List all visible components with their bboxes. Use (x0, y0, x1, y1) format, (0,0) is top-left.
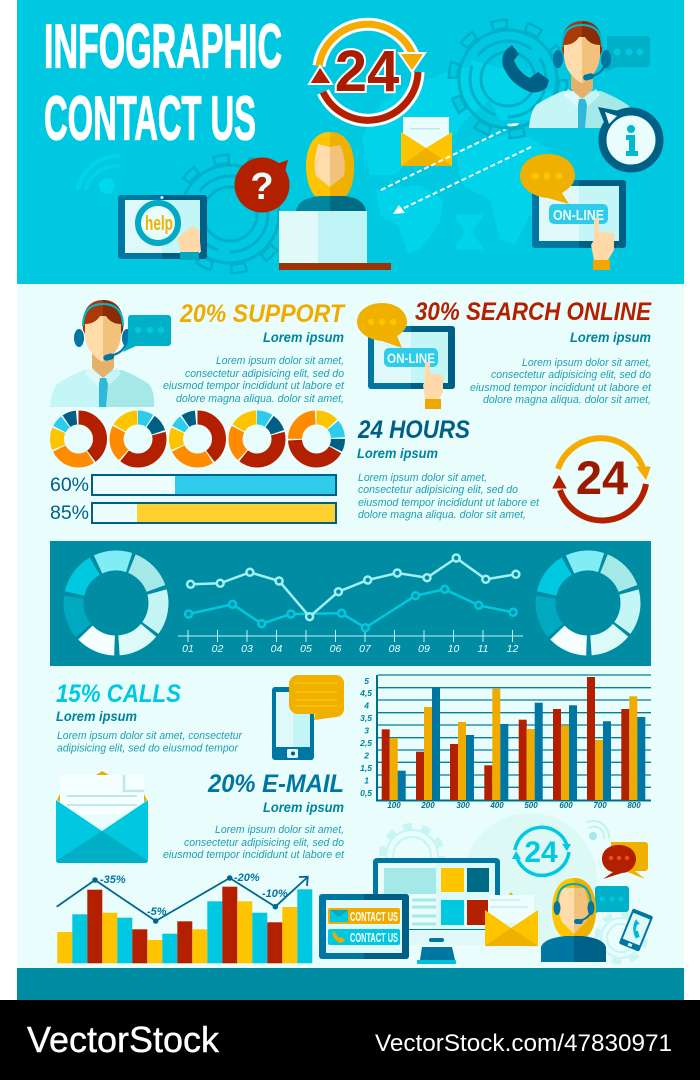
icon: online tablet header (520, 154, 626, 270)
line chart: 02 (212, 643, 223, 655)
line chart: 12 (507, 643, 518, 655)
watermark bar (0, 1000, 700, 1080)
text block: 24 hours: consectetur adipisicing elit, sed do (358, 484, 518, 496)
bar chart: 4 (363, 700, 369, 710)
bar and trend chart (57, 872, 312, 963)
bar chart: 3 (364, 726, 369, 736)
text block: 24 hours (357, 416, 540, 521)
donut 3 (176, 418, 219, 460)
series two (185, 586, 517, 631)
text block: 24 hours: Lorem ipsum dolor sit amet, (358, 472, 487, 484)
bubble: woman (588, 886, 629, 918)
arrows: dashed exchange (381, 123, 531, 214)
donut charts row (57, 418, 338, 460)
icon: small 24 clock (512, 827, 571, 875)
bar chart: 1,5 (360, 763, 372, 773)
donut right (528, 543, 648, 663)
bar chart: 100 (387, 801, 401, 810)
button: contact email: CONTACT US (350, 909, 398, 924)
text block: 24 hours: 24 HOURS (357, 416, 470, 444)
world map background (362, 60, 570, 254)
icon: info bubble (598, 107, 660, 168)
donut 1 (57, 418, 100, 460)
text block: support: consectetur adipisicing elit, sed do (185, 368, 344, 380)
watermark bar: VectorStock.com/47830971 (375, 1030, 672, 1057)
text block: 24 hours: Lorem ipsum (357, 445, 438, 461)
icon: online tablet (357, 303, 455, 409)
icon: question bubble: ? (250, 166, 274, 208)
line chart: 05 (300, 643, 312, 655)
man with headset, header (529, 21, 632, 128)
yellow bars (390, 689, 637, 800)
bar chart: 2 (363, 750, 369, 760)
icon: tablet help: help (145, 213, 173, 235)
line chart: 09 (418, 643, 430, 655)
icon: smartphone with message (272, 675, 344, 760)
bar chart: 400 (489, 801, 504, 810)
icon: message bubbles (602, 842, 648, 879)
icon: left gear (175, 159, 285, 269)
icon: envelope (401, 117, 452, 166)
panel: body background (17, 284, 684, 968)
title: INFOGRAPHIC (44, 12, 282, 81)
text block: e-mail: Lorem ipsum dolor sit amet, (215, 824, 344, 836)
text block: support: Lorem ipsum (263, 329, 344, 345)
line chart: 11 (478, 643, 488, 655)
bar chart (359, 675, 651, 810)
text block: support (163, 300, 347, 405)
icon: contact tablet (319, 894, 409, 959)
icon: right gear (453, 24, 563, 134)
text block: search online: 30% SEARCH ONLINE (415, 298, 652, 326)
text block: e-mail: 20% E-MAIL (207, 770, 344, 798)
bar and trend chart: -20% (234, 872, 260, 884)
icon: yellow envelope (485, 892, 538, 946)
progress bars (50, 475, 336, 524)
donut left (56, 543, 176, 663)
text block: 24 hours: eiusmod tempor incididunt ut labore et (358, 497, 540, 509)
icon: phone tilted (619, 908, 653, 952)
progress bars: 60% (50, 475, 89, 496)
line chart: 03 (241, 643, 253, 655)
text block: support: 20% SUPPORT (179, 300, 347, 328)
donut 2 (116, 418, 160, 460)
line chart (178, 554, 523, 655)
series one (187, 554, 519, 620)
bubble: header man (604, 36, 650, 72)
text block: support: eiusmod tempor incididunt ut labore et (163, 380, 345, 392)
bar chart: 4,5 (359, 688, 372, 698)
text block: support: dolore magna aliqua. dolor sit amet, (176, 393, 344, 405)
red bars (382, 677, 629, 800)
bar chart: 700 (593, 801, 607, 810)
text block: calls: 15% CALLS (56, 680, 181, 708)
text block: e-mail: consectetur adipisicing elit, sed do (184, 837, 344, 849)
gear faint top (382, 826, 442, 886)
line chart: 07 (359, 643, 372, 655)
icon: computer monitor (373, 858, 500, 964)
trend line (57, 875, 308, 924)
panel: header background (17, 0, 684, 284)
donut 4 (236, 418, 278, 460)
bar chart: 1 (364, 776, 369, 786)
icon: 24 hours clock (553, 438, 650, 520)
text block: e-mail: eiusmod tempor incididunt ut labore et (163, 849, 345, 861)
bar chart: 2,5 (359, 738, 372, 748)
bar chart: 600 (559, 801, 573, 810)
icon: 24 hours badge: 24 (335, 39, 399, 104)
text block: e-mail (163, 770, 345, 861)
text block: search online (415, 298, 652, 406)
bar chart: 200 (420, 801, 435, 810)
icon: faint wifi (587, 821, 609, 840)
text block: support: Lorem ipsum dolor sit amet, (216, 355, 344, 367)
bar and trend chart: -35% (100, 874, 126, 886)
line chart: 01 (182, 643, 194, 655)
panel: line chart band (50, 541, 651, 666)
man with headset, support (50, 300, 154, 407)
icon: phone handset (502, 45, 549, 92)
icon: hourglass (455, 214, 482, 250)
title (44, 12, 282, 153)
bubble: support man (123, 315, 171, 352)
icon: online tablet: ON-LINE (387, 350, 435, 366)
world map faint (463, 813, 597, 947)
text block: calls: adipisicing elit, sed do eiusmod tempor (57, 742, 239, 754)
icon: open envelope (56, 771, 148, 863)
bar chart: 300 (456, 801, 470, 810)
gear faint right (597, 914, 645, 962)
text block: search online: Lorem ipsum (570, 329, 651, 345)
button: contact phone: CONTACT US (350, 930, 398, 945)
line chart: 08 (389, 643, 400, 655)
title: CONTACT US (44, 84, 256, 153)
icon: small 24 clock: 24 (524, 836, 558, 869)
icon: wifi (78, 156, 118, 194)
line chart: 06 (330, 643, 341, 655)
icon: 24 hours clock: 24 (576, 451, 628, 504)
text block: calls: Lorem ipsum (56, 708, 137, 724)
footer band (17, 968, 684, 1000)
bar and trend chart: -5% (147, 906, 167, 918)
text block: calls (56, 680, 243, 754)
icon: question bubble (234, 158, 290, 212)
bar chart: 3,5 (360, 713, 372, 723)
bar chart: 800 (627, 801, 641, 810)
text block: e-mail: Lorem ipsum (263, 799, 344, 815)
text block: search online: eiusmod tempor incididunt ut labore et (470, 382, 652, 394)
icon: tablet help (118, 195, 207, 260)
blue bars (398, 688, 645, 800)
woman at laptop (279, 132, 391, 270)
icon: 24 hours badge (309, 24, 425, 120)
text block: 24 hours: dolore magna aliqua. dolor sit amet, (358, 509, 526, 521)
woman with headset (541, 878, 606, 962)
bar chart: 500 (524, 801, 538, 810)
text block: calls: Lorem ipsum dolor sit amet, consectetur (57, 730, 243, 742)
text block: search online: dolore magna aliqua. dolor sit amet, (483, 394, 651, 406)
text block: search online: consectetur adipisicing elit, sed do (491, 369, 651, 381)
watermark bar: VectorStock (27, 1019, 220, 1060)
donut 5 (295, 418, 338, 460)
bar and trend chart: -10% (262, 888, 288, 900)
progress bars: 85% (50, 503, 89, 524)
bar chart: 5 (364, 676, 369, 686)
text block: search online: Lorem ipsum dolor sit amet, (522, 357, 651, 369)
line chart: 04 (271, 643, 282, 655)
icon: online tablet header: ON-LINE (553, 207, 604, 224)
line chart: 10 (448, 643, 459, 655)
bar chart: 0,5 (360, 788, 372, 798)
